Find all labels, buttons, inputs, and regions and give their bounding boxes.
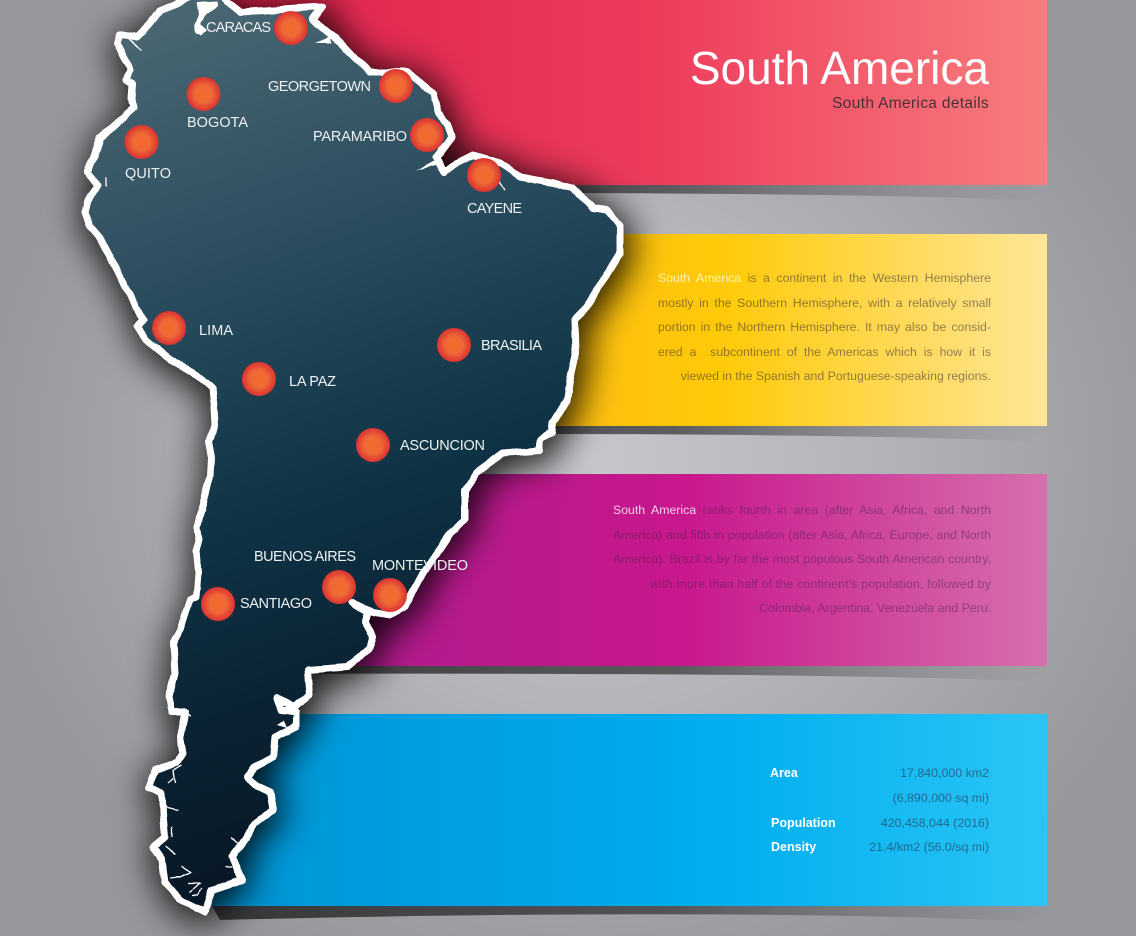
city labels: BUENOS AIRES xyxy=(254,549,356,565)
stats table: Area xyxy=(770,766,798,780)
stats table: 17,840,000 km2 xyxy=(900,766,989,780)
text block: continent description: ered a subcontinent of the Americas which is how it is xyxy=(658,345,991,359)
text block: continent description xyxy=(658,273,991,382)
text block: continent description: mostly in the Southern Hemisphere, with a relatively small xyxy=(658,296,991,310)
continent shadow xyxy=(88,0,623,918)
stats table: 21.4/km2 (56.0/sq mi) xyxy=(869,840,989,854)
city marker: Bogota xyxy=(186,77,220,111)
stats table xyxy=(770,768,988,854)
coastal inlets and fjords xyxy=(106,37,505,895)
stats table: Density xyxy=(771,840,816,854)
coastal spikes xyxy=(277,37,438,728)
city labels: SANTIAGO xyxy=(240,596,312,612)
city marker: Montevideo xyxy=(373,578,407,612)
city marker: La Paz xyxy=(242,362,276,396)
city labels xyxy=(125,20,542,612)
text block: area and population ranking: with more than half of the continent's population, followed by xyxy=(650,577,991,591)
continent: South America xyxy=(85,0,620,912)
city marker: Paramaribo xyxy=(410,118,444,152)
title: South America xyxy=(690,42,989,94)
city marker: Santiago xyxy=(201,587,235,621)
text block: area and population ranking xyxy=(613,505,991,614)
lake Maracaibo inlet xyxy=(195,1,217,36)
stats table: (6,890,000 sq mi) xyxy=(893,791,989,805)
city marker: Cayene xyxy=(467,158,501,192)
subtitle: South America details xyxy=(832,95,989,112)
panel shadow wedges xyxy=(190,185,1047,921)
city marker: Ascuncion xyxy=(356,428,390,462)
text block: continent description: portion in the Northern Hemisphere. It may also be consid- xyxy=(658,320,991,334)
city marker: Caracas xyxy=(274,11,308,45)
city labels: CAYENE xyxy=(467,201,522,217)
city labels: PARAMARIBO xyxy=(313,129,407,145)
panel: magenta description band xyxy=(354,474,1047,666)
text block: area and population ranking: America) and fifth in population (after Asia, Africa, Europe, and North xyxy=(613,528,991,542)
city labels: QUITO xyxy=(125,166,171,182)
text block: continent description: South America is a continent in the Western Hemisphere xyxy=(658,271,991,285)
stats table: Population xyxy=(771,816,836,830)
city labels: MONTEVIDEO xyxy=(372,558,468,574)
city marker: Quito xyxy=(124,125,158,159)
city labels: GEORGETOWN xyxy=(268,79,371,95)
city marker: Brasilia xyxy=(437,328,471,362)
city labels: CARACAS xyxy=(206,20,271,36)
city marker: Georgetown xyxy=(379,69,413,103)
city labels: BOGOTA xyxy=(187,115,248,131)
text block: area and population ranking: Colombia, Argentina, Venezuela and Peru. xyxy=(759,601,991,615)
city labels: ASCUNCION xyxy=(400,438,485,454)
city marker: Lima xyxy=(152,311,186,345)
city labels: LIMA xyxy=(199,323,233,339)
panel: yellow description band xyxy=(556,234,1047,426)
text block: continent description: viewed in the Spanish and Portuguese-speaking regions. xyxy=(681,369,991,383)
city labels: BRASILIA xyxy=(481,338,542,354)
text block: area and population ranking: South America ranks fourth in area (after Asia, Africa, and North xyxy=(613,503,991,517)
panel: red header band xyxy=(190,0,1047,185)
text block: area and population ranking: America). Brazil is by far the most populous South American country, xyxy=(613,552,991,566)
stats table: 420,458,044 (2016) xyxy=(881,816,989,830)
city marker: Buenos Aires xyxy=(322,570,356,604)
city labels: LA PAZ xyxy=(289,374,336,390)
panel: blue statistics band xyxy=(190,714,1047,906)
